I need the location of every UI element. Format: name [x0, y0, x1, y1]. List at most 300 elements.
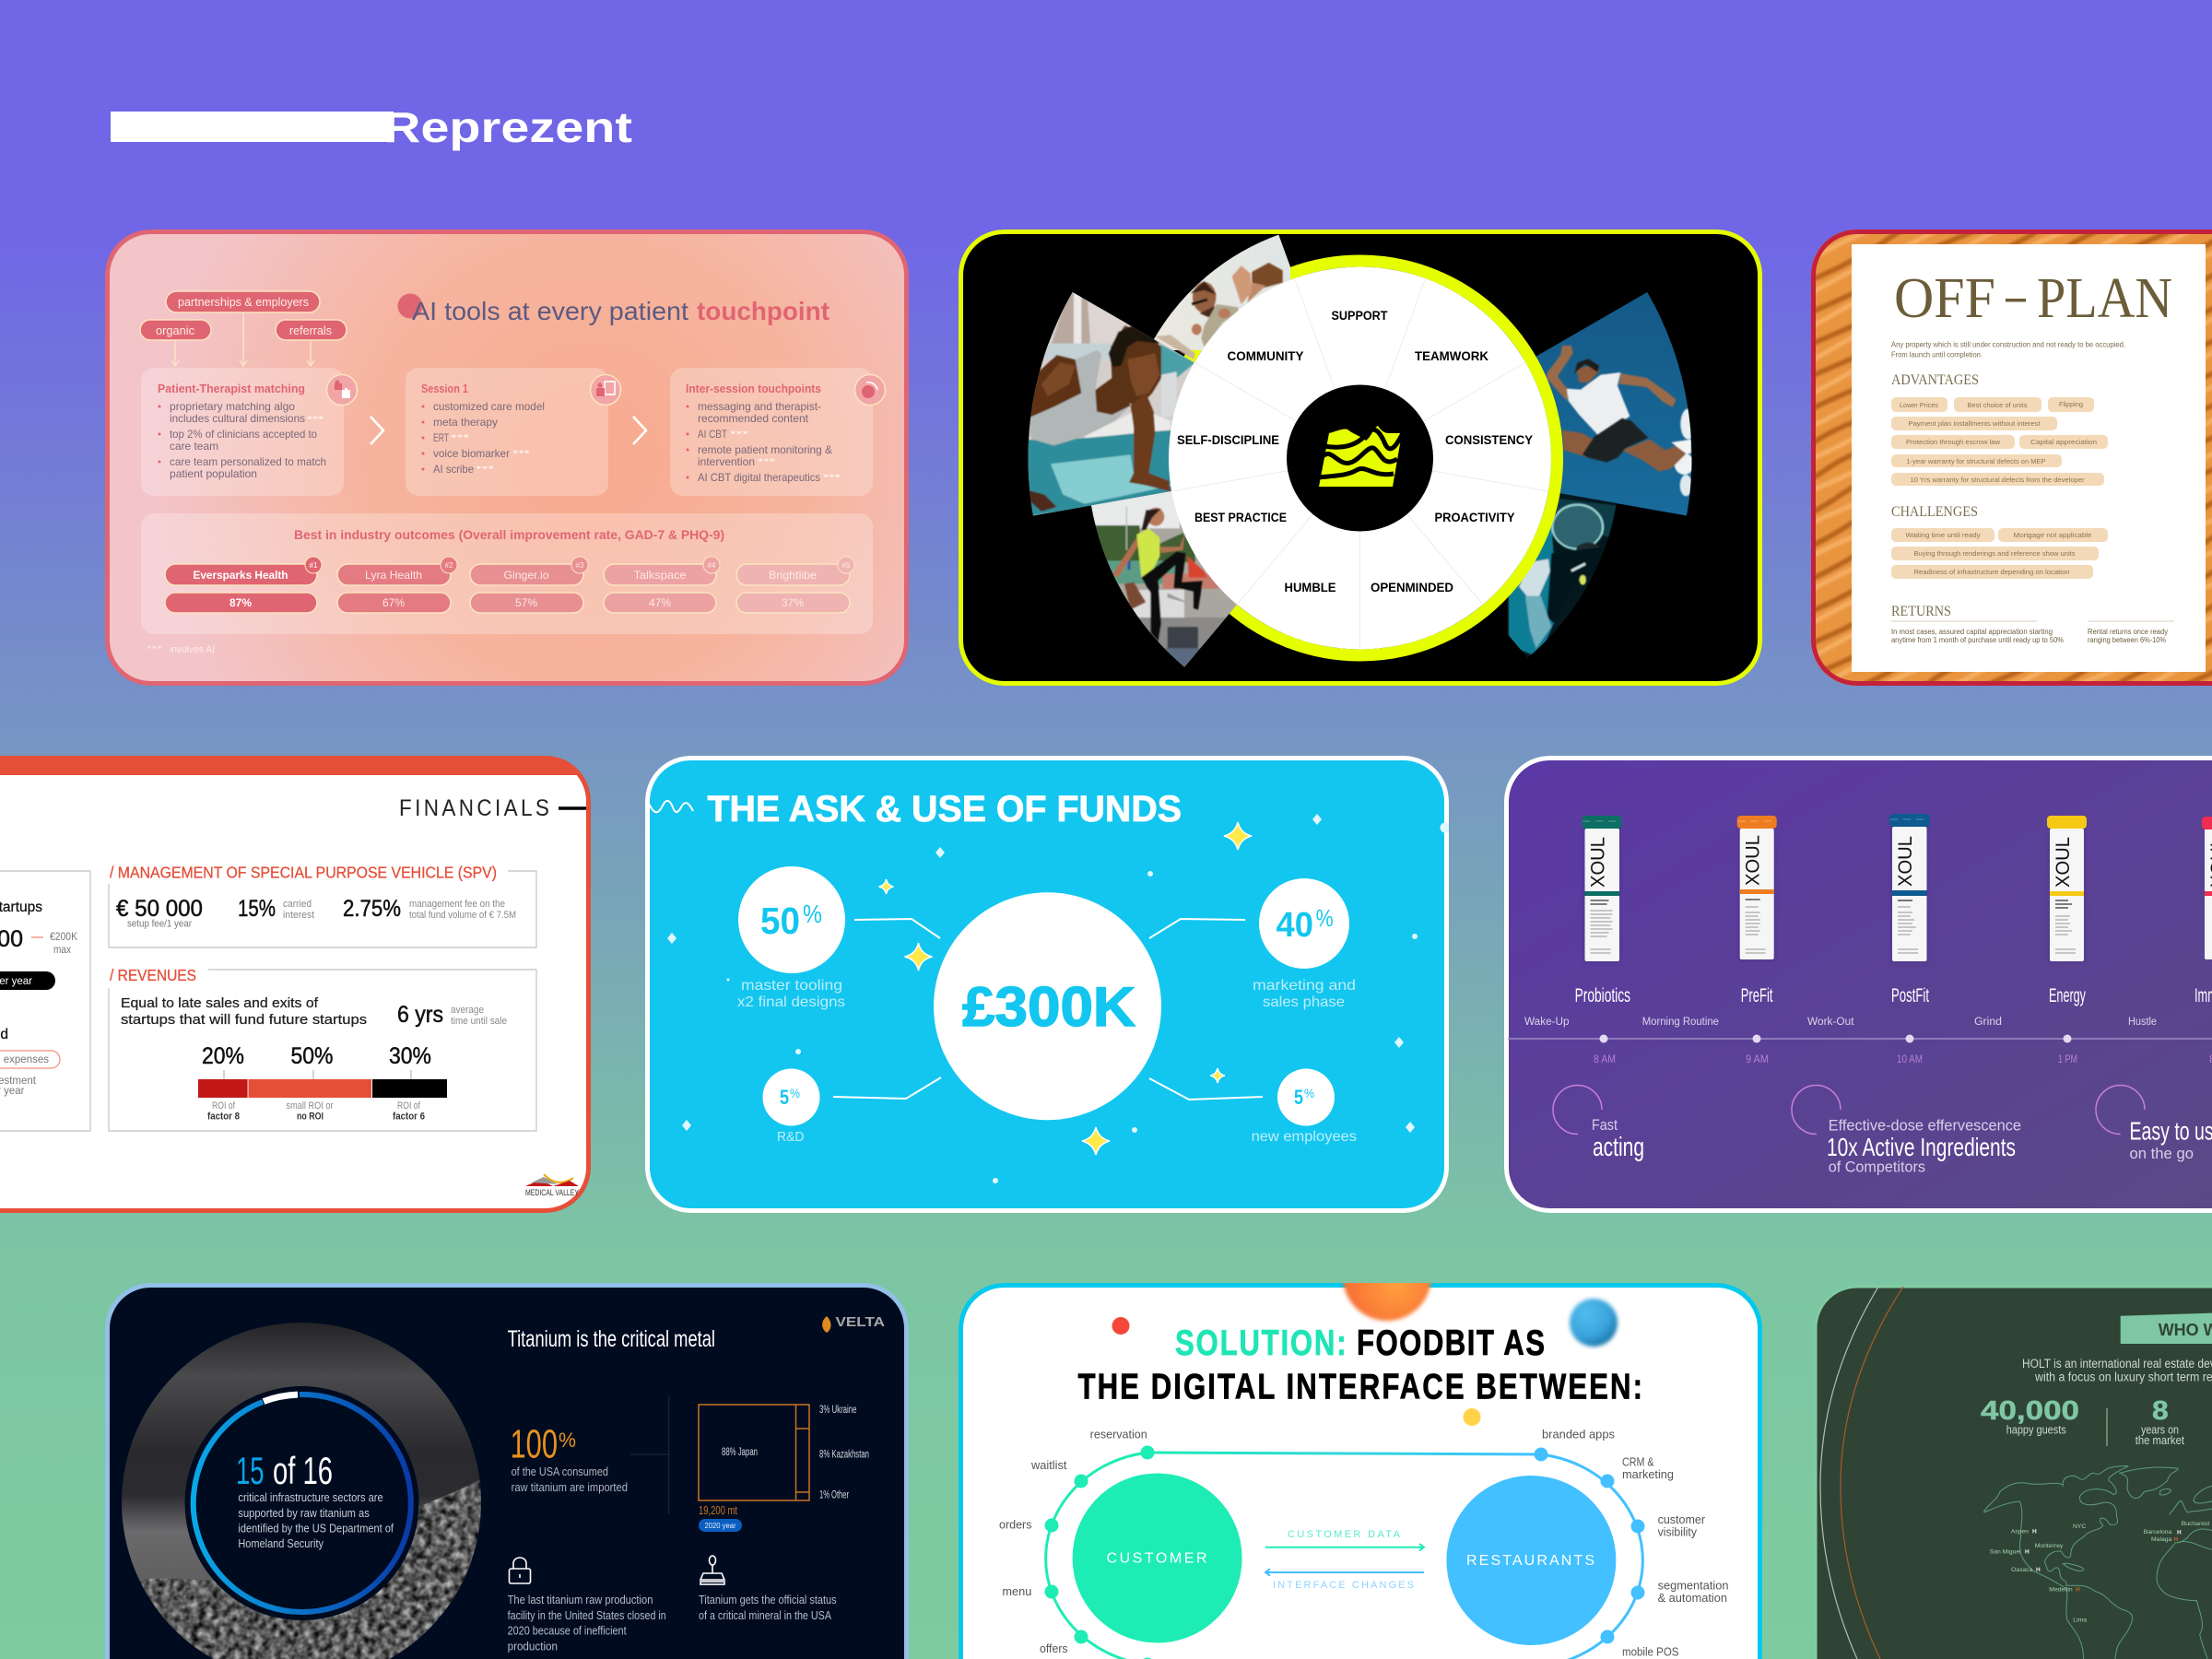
- left box fragments: max: [53, 945, 71, 956]
- wheel labels: HUMBLE: [1285, 581, 1336, 594]
- stat: 50 percent: [737, 866, 845, 1010]
- stacked bar: ROI split: no ROI: [297, 1112, 324, 1123]
- stat: 50 percent: 50: [760, 900, 800, 942]
- footnote: involves AI: ***: [147, 644, 163, 653]
- title: AI tools: [398, 293, 830, 325]
- pill: partnerships and employers: partnerships & employers: [178, 295, 309, 309]
- arrow: customer data: CUSTOMER DATA: [1288, 1529, 1401, 1540]
- panel: Patient-Therapist matching: proprietary matching algo: [170, 400, 295, 413]
- photo: man push-up: [1029, 292, 1194, 516]
- dial: 15 of 16: 15: [236, 1449, 265, 1492]
- text: last production facility: production: [508, 1640, 558, 1653]
- map: city labels: Bucharest: [2182, 1521, 2209, 1527]
- wheel labels: PROACTIVITY: [1434, 511, 1515, 524]
- panel: Inter-session touchpoints: [670, 368, 873, 496]
- ranking: Lyra Health: 67%: [382, 596, 405, 609]
- pill: organic: [140, 320, 211, 340]
- pill: organic: organic: [156, 324, 194, 337]
- map: property markers: H: [2173, 1536, 2179, 1543]
- dial: 15 of 16: supported by raw titanium as: [238, 1506, 370, 1520]
- map: property markers: H: [2025, 1548, 2030, 1556]
- title: OFF-PLAN: [1894, 267, 2172, 330]
- panel: Inter-session touchpoints: AI CBT digital therapeutics: [698, 471, 820, 484]
- section: SPV management: [109, 864, 536, 947]
- text: last production facility: The last titanium raw production: [508, 1593, 653, 1606]
- dial: 15 of 16: [184, 1386, 418, 1620]
- product names: [1575, 985, 2212, 1006]
- orbit: restaurant side: CRM &: [1622, 1456, 1654, 1469]
- panel: Inter-session touchpoints: ***: [730, 429, 749, 439]
- icon: stamp: [700, 1556, 724, 1584]
- chips: advantages: Capital appreciation: [2030, 438, 2097, 446]
- heading: returns: RETURNS: [1891, 604, 1951, 619]
- photo: jumping man: [1525, 292, 1692, 516]
- ring: lime: [1163, 261, 1558, 655]
- text: official status: of a critical mineral in the USA: [699, 1608, 831, 1622]
- map: city labels: Medellin: [2049, 1587, 2073, 1593]
- tube: energy: [2047, 816, 2087, 963]
- panel: Session 1: Session 1: [421, 382, 468, 395]
- stacked bar: ROI split: [198, 1043, 447, 1123]
- chips: advantages: 1-year warranty for structural defects on MEP: [1906, 457, 2046, 465]
- panel: Inter-session touchpoints: intervention: [698, 455, 755, 468]
- panel: Patient-Therapist matching: Patient-Therapist matching: [158, 382, 305, 395]
- icon: puzzle: [326, 374, 358, 406]
- panel: Patient-Therapist matching: care team personalized to match: [170, 455, 326, 468]
- timeline: 9 AM: [1746, 1054, 1769, 1065]
- callout: fast acting: [1553, 1086, 1644, 1162]
- title: FINANCIALS: FINANCIALS: [399, 795, 549, 821]
- intro text: From launch until completion.: [1891, 351, 1983, 359]
- heading: Titanium is the critical metal: Titanium is the critical metal: [508, 1326, 715, 1352]
- chart: import share treemap: 2020 year: [704, 1522, 736, 1530]
- logo: Velta: [822, 1314, 885, 1333]
- stat: 8 years: 8: [2152, 1396, 2169, 1426]
- stat: 8 years: [2136, 1396, 2184, 1447]
- callout: 10x active ingredients: [1792, 1086, 2021, 1176]
- photo: diver: [1508, 493, 1617, 658]
- tube: energy: XOUL: [2053, 837, 2074, 888]
- arrows into first panel: [171, 312, 314, 366]
- heading: outcomes: Best in industry outcomes (Overall improvement rate, GAD-7 & PHQ-9): [294, 528, 724, 542]
- panel: Off-plan: [1811, 229, 2212, 686]
- tube: postfit: XOUL: [1895, 836, 1916, 887]
- stat: 5 percent new employees: [1252, 1069, 1357, 1145]
- chips: advantages: Best choice of units: [1967, 401, 2028, 409]
- stacked bar: ROI split: small ROI or: [286, 1100, 334, 1112]
- ranking: Eversparks Health: Eversparks Health: [194, 569, 288, 582]
- title: solution: SOLUTION:: [1175, 1324, 1347, 1363]
- logo: Medical Valley: [525, 1174, 579, 1197]
- returns text: anytime from 1 month of purchase until ready up to 50%: [1891, 636, 2064, 644]
- stat: 50 percent: x2 final designs: [737, 994, 845, 1010]
- section: revenues: [109, 966, 536, 1131]
- stat: 8 years: the market: [2136, 1434, 2184, 1447]
- map: property markers: [2025, 1528, 2182, 1593]
- stat: 40,000 guests: 40,000: [1981, 1396, 2079, 1426]
- title: solution: THE DIGITAL INTERFACE BETWEEN:: [1078, 1367, 1642, 1407]
- title: solution: FOODBIT AS: [1357, 1324, 1545, 1363]
- chips: challenges: [1891, 528, 2108, 579]
- map: property markers: H: [2036, 1567, 2041, 1573]
- panel: Inter-session touchpoints: ***: [823, 473, 841, 482]
- arrow: interface changes: INTERFACE CHANGES: [1273, 1580, 1414, 1591]
- panel: Session 1: [406, 368, 608, 496]
- photo ring: titanium sand: [120, 1323, 484, 1659]
- stacked bar: ROI split: factor 8: [207, 1112, 240, 1123]
- timeline: [1508, 1017, 2212, 1065]
- orbit: connecting top line: [1147, 1453, 1541, 1454]
- stat: 8 years: years on: [2141, 1424, 2179, 1437]
- stat: 40 percent: %: [1316, 904, 1334, 932]
- stat: 100 percent: raw titanium are imported: [512, 1481, 628, 1494]
- map: property markers: H: [2032, 1528, 2037, 1535]
- panel: values wheel: [960, 230, 1760, 684]
- chart: import share treemap: 88% Japan: [722, 1447, 758, 1458]
- stacked bar: ROI split: 20%: [202, 1043, 244, 1069]
- stat: 40 percent: 40: [1276, 906, 1313, 945]
- panel: Session 1: ***: [451, 433, 470, 442]
- stat: 40,000 guests: happy guests: [2006, 1424, 2066, 1437]
- returns text: Rental returns once ready: [2088, 628, 2168, 636]
- wheel labels: SELF-DISCIPLINE: [1177, 433, 1279, 447]
- text: last production facility: [508, 1593, 666, 1653]
- stacked bar: ROI split: ROI of: [397, 1100, 421, 1112]
- chart: import share treemap: [699, 1405, 869, 1532]
- arrow: customer data: [1265, 1529, 1424, 1550]
- stat: 100 percent: %: [559, 1429, 576, 1452]
- dial: 15 of 16: of 16: [273, 1449, 333, 1492]
- arrow: chevron 1: [371, 417, 383, 444]
- product names: Probiotics: [1575, 985, 1630, 1006]
- chart: import share treemap: 3% Ukraine: [819, 1405, 857, 1416]
- map: city labels: San Miguel: [1990, 1548, 2021, 1556]
- panel: Session 1: ***: [512, 449, 531, 458]
- section: SPV management: total fund volume of € 7.5M: [409, 910, 516, 921]
- ranking: Lyra Health: Lyra Health: [365, 569, 422, 582]
- returns text: In most cases, assured capital appreciation starting: [1891, 628, 2053, 636]
- center circle: £300K: [934, 892, 1161, 1120]
- text: last production facility: facility in the United States closed in: [508, 1608, 666, 1622]
- map: city labels: Malaga: [2151, 1536, 2172, 1543]
- panel: Inter-session touchpoints: messaging and therapist-: [698, 400, 821, 413]
- timeline: Morning Routine: [1642, 1017, 1719, 1028]
- stacked bar: ROI split: ROI of: [212, 1100, 236, 1112]
- map: world outline: [1983, 1466, 2212, 1659]
- photo: athletes training: [1091, 491, 1237, 667]
- callout: 10x active ingredients: 10x Active Ingredients: [1827, 1133, 2016, 1161]
- chips: challenges: Waiting time until ready: [1906, 531, 1981, 539]
- panel: Patient-Therapist matching: [141, 368, 344, 496]
- tube: immunity: [2202, 817, 2212, 959]
- stat: 40 percent: marketing and: [1253, 978, 1356, 994]
- stat: 5 percent R and D: [763, 1069, 820, 1145]
- chips: advantages: Lower Prices: [1900, 401, 1938, 409]
- panel: Patient-Therapist matching: top 2% of clinicians accepted to: [170, 428, 317, 441]
- orbit: customer side: [999, 1429, 1154, 1659]
- chips: advantages: Flipping: [2059, 400, 2083, 408]
- footnote: involves AI: [147, 645, 214, 653]
- ranking: Ginger.io: Ginger.io: [503, 569, 549, 582]
- stacked bar: ROI split: 50%: [291, 1043, 334, 1069]
- left box fragments: [0, 871, 90, 1131]
- map: city labels: [1990, 1521, 2209, 1624]
- circle: customer: [1073, 1473, 1242, 1642]
- section: SPV management: € 50 000: [116, 896, 203, 922]
- photo: friends high five: [1154, 234, 1290, 359]
- ranking: Talkspace: 47%: [649, 596, 671, 609]
- circle: customer: CUSTOMER: [1106, 1551, 1207, 1567]
- section: SPV management: setup fee/1 year: [127, 919, 192, 930]
- panel: Session 1: AI scribe: [433, 463, 474, 476]
- panel: Patient-Therapist matching: patient population: [170, 467, 257, 480]
- pill: partnerships and employers: [166, 291, 320, 312]
- panel: HOLT who we are: [1816, 1287, 2212, 1659]
- orbit: customer side: orders: [999, 1519, 1032, 1532]
- panel: Patient-Therapist matching: includes cultural dimensions: [170, 412, 305, 425]
- wheel labels: [1177, 309, 1533, 594]
- dial: 15 of 16: Homeland Security: [238, 1536, 324, 1550]
- ranking: Brightlibe: 37%: [782, 596, 804, 609]
- orbit: restaurant side: marketing: [1622, 1468, 1674, 1481]
- title: AI tools: touchpoint: [697, 297, 830, 325]
- chips: advantages: Protection through escrow law: [1906, 438, 2001, 446]
- icon: presenter: [590, 374, 621, 406]
- stat: 5 percent new employees: 5: [1294, 1086, 1303, 1109]
- timeline: Grind: [1974, 1017, 2002, 1028]
- panel: Patient-Therapist matching: care team: [170, 440, 218, 453]
- pill: referrals: [276, 320, 347, 340]
- wheel: white disc with spokes: [1169, 267, 1551, 649]
- stat: 5 percent R and D: R&D: [777, 1129, 805, 1145]
- logo: Reprezent wordmark: [111, 103, 632, 151]
- orbit: restaurant side: visibility: [1658, 1526, 1698, 1539]
- timeline: Work-Out: [1807, 1017, 1854, 1028]
- panel: Inter-session touchpoints: Inter-session touchpoints: [686, 382, 821, 395]
- stat: 5 percent new employees: new employees: [1252, 1129, 1357, 1145]
- section: SPV management: / MANAGEMENT OF SPECIAL PURPOSE VEHICLE (SPV): [110, 864, 497, 882]
- stat: 50 percent: %: [803, 900, 822, 928]
- stat: 5 percent R and D: %: [790, 1086, 800, 1100]
- orbit: restaurant side: customer: [1658, 1513, 1705, 1526]
- orbit: restaurant side: mobile POS: [1622, 1646, 1679, 1659]
- ranking: Brightlibe: #5: [842, 561, 851, 570]
- map: city labels: Barcelona: [2144, 1529, 2172, 1535]
- section: revenues: time until sale: [451, 1016, 507, 1027]
- orbit: restaurant side: branded apps: [1542, 1429, 1615, 1441]
- intro text: [2022, 1357, 2212, 1384]
- wheel labels: OPENMINDED: [1371, 581, 1453, 594]
- chart: import share treemap: 19,200 mt: [699, 1503, 737, 1517]
- panel: Patient-Therapist matching: ***: [307, 415, 324, 424]
- tube: prefit: XOUL: [1743, 835, 1764, 886]
- chips: challenges: Mortgage not applicable: [2013, 531, 2092, 539]
- returns text: ranging between 6%-10%: [2088, 636, 2166, 644]
- callout: fast acting: Fast: [1592, 1116, 1618, 1134]
- panel: Session 1: ERT: [433, 431, 449, 444]
- callout: 10x active ingredients: of Competitors: [1829, 1159, 1925, 1176]
- panel: Inter-session touchpoints: remote patient monitoring &: [698, 443, 832, 456]
- ranking: Ginger.io: [470, 557, 588, 613]
- returns text: [1891, 621, 2174, 644]
- dial: 15 of 16: critical infrastructure sectors are: [238, 1490, 383, 1504]
- title: OFF-PLAN: OFF: [1894, 267, 1995, 330]
- chart: import share treemap: 8% Kazakhstan: [819, 1450, 869, 1461]
- callout: easy to use: [2096, 1086, 2212, 1162]
- title: ask: THE ASK & USE OF FUNDS: [708, 789, 1182, 830]
- title: OFF-PLAN: PLAN: [2037, 267, 2172, 330]
- chart: import share treemap: 1% Other: [819, 1490, 849, 1501]
- wheel labels: COMMUNITY: [1228, 349, 1303, 363]
- callout: easy to use: on the go: [2129, 1145, 2194, 1162]
- logo: Medical Valley: MEDICAL VALLEY: [525, 1188, 579, 1197]
- intro text: [1891, 341, 2125, 359]
- icon: lock: [509, 1558, 531, 1583]
- panel: Financials: [0, 756, 591, 1211]
- panel: XOUL timeline: [1506, 758, 2212, 1211]
- orbit: customer side: waitlist: [1030, 1459, 1067, 1472]
- stat: 100 percent: 100: [511, 1422, 558, 1467]
- ranking: Talkspace: #4: [708, 561, 716, 570]
- panel: Inter-session touchpoints: recommended content: [698, 412, 809, 425]
- text: last production facility: 2020 because of inefficient: [508, 1624, 627, 1638]
- left box fragments: €200K: [50, 932, 77, 943]
- stacked bar: ROI split: factor 6: [393, 1112, 425, 1123]
- tube: probiotics: XOUL: [1587, 837, 1609, 888]
- tube: probiotics: [1582, 816, 1622, 963]
- product names: PostFit: [1891, 985, 1929, 1006]
- stat: 5 percent R and D: 5: [780, 1086, 789, 1109]
- decorative arcs: [1820, 1287, 1903, 1659]
- panel: Inter-session touchpoints: AI CBT: [698, 428, 728, 441]
- chips: advantages: [1891, 397, 2108, 486]
- map: city labels: Monterrey: [2035, 1543, 2064, 1549]
- tube: prefit: [1737, 816, 1777, 961]
- section: revenues: / REVENUES: [110, 966, 196, 984]
- ranking: Lyra Health: [337, 557, 457, 613]
- panel: AI tools at every patient touchpoint: [107, 232, 907, 684]
- chips: challenges: Buying through renderings and reference show units: [1913, 549, 2076, 558]
- panel: Foodbit solution: [960, 1232, 1760, 1659]
- white sheet: [1852, 244, 2206, 672]
- ranking: Brightlibe: [736, 557, 854, 613]
- circle: restaurants: RESTAURANTS: [1466, 1553, 1594, 1569]
- panel: Titanium: [107, 1285, 907, 1659]
- heading: advantages: ADVANTAGES: [1891, 372, 1979, 388]
- center circle: £300K: £300K: [962, 976, 1135, 1038]
- product names: Energy: [2049, 985, 2086, 1006]
- stat: 40 percent: sales phase: [1263, 994, 1345, 1010]
- ranking: Eversparks Health: 87%: [229, 596, 252, 609]
- timeline: 1 PM: [2058, 1054, 2077, 1065]
- stat: 5 percent new employees: %: [1304, 1086, 1314, 1100]
- stat: 40,000 guests: [1981, 1396, 2079, 1437]
- ranking: Ginger.io: #3: [576, 561, 584, 570]
- panel: Inter-session touchpoints: ***: [758, 457, 776, 466]
- connector lines: [833, 919, 1263, 1100]
- section: revenues: startups that will fund future startups: [121, 1012, 367, 1028]
- decorative sparkles and dots: [667, 814, 1451, 1183]
- icon: chat bubble: [855, 374, 885, 406]
- chips: advantages: Payment plan installments without interest: [1908, 419, 2041, 428]
- ranking: Eversparks Health: #1: [310, 561, 318, 570]
- intro text: Any property which is still under construction and not ready to be occupied.: [1891, 341, 2125, 349]
- orbit: restaurant side: & automation: [1658, 1592, 1727, 1605]
- section: SPV management: 15%: [238, 896, 276, 922]
- wheel labels: TEAMWORK: [1415, 349, 1488, 363]
- stacked bar: ROI split: 30%: [389, 1043, 431, 1069]
- map: property markers: H: [2076, 1587, 2080, 1593]
- circle: restaurants: [1446, 1476, 1616, 1645]
- ranking: Talkspace: [604, 557, 720, 613]
- orbit: customer side: reservation: [1090, 1429, 1147, 1441]
- panel: Session 1: ***: [476, 465, 495, 474]
- panel: Session 1: voice biomarker: [433, 447, 510, 460]
- section: SPV management: interest: [283, 910, 314, 921]
- orbit: customer side: offers: [1040, 1642, 1068, 1655]
- arrow: chevron 2: [633, 417, 646, 444]
- product names: PreFit: [1741, 985, 1773, 1006]
- panel: Session 1: customized care model: [433, 400, 545, 413]
- section: SPV management: 2.75%: [343, 896, 401, 922]
- ranking: Lyra Health: #2: [445, 561, 453, 570]
- orbit: customer side: menu: [1002, 1585, 1031, 1598]
- logo: Reprezent wordmark: Reprezent: [383, 103, 632, 151]
- text: official status: Titanium gets the official status: [699, 1593, 837, 1606]
- text: official status: [699, 1593, 837, 1622]
- title: AI tools: AI tools at every patient: [412, 297, 688, 325]
- ranking: Ginger.io: 57%: [515, 596, 537, 609]
- map: city labels: Aspen: [2011, 1528, 2029, 1535]
- ranking: Brightlibe: Brightlibe: [769, 569, 817, 582]
- logo: Velta: VELTA: [835, 1314, 885, 1330]
- map: property markers: H: [2177, 1530, 2182, 1535]
- tube: postfit: [1889, 814, 1930, 963]
- ranking: Talkspace: Talkspace: [634, 569, 687, 582]
- chips: challenges: Readiness of infrastructure depending on location: [1913, 568, 2070, 576]
- stat: 100 percent: of the USA consumed: [512, 1465, 608, 1478]
- orbit: restaurant side: segmentation: [1658, 1580, 1729, 1593]
- heading: challenges: CHALLENGES: [1891, 504, 1978, 520]
- map: city labels: NYC: [2073, 1524, 2086, 1530]
- section: SPV management: carried: [283, 899, 312, 910]
- dial: 15 of 16: identified by the US Department of: [238, 1522, 394, 1535]
- pill: referrals: referrals: [289, 324, 332, 337]
- stat: 100 percent: [511, 1422, 628, 1494]
- callout: 10x active ingredients: Effective-dose effervescence: [1829, 1117, 2021, 1135]
- timeline: Hustle: [2128, 1017, 2157, 1028]
- section: revenues: Equal to late sales and exits of: [121, 995, 319, 1011]
- wheel labels: CONSISTENCY: [1445, 433, 1533, 447]
- callout: fast acting: acting: [1593, 1133, 1644, 1162]
- hub with wave logo: [1287, 385, 1433, 531]
- timeline: 10 AM: [1897, 1054, 1923, 1065]
- decorative orbs: [1112, 1232, 1618, 1426]
- tag: who we are: [2121, 1312, 2212, 1344]
- section: SPV management: management fee on the: [409, 899, 505, 910]
- ranking: Eversparks Health: [165, 557, 322, 613]
- stat: 50 percent: master tooling: [741, 978, 842, 994]
- footnote: involves AI: involves AI: [170, 644, 215, 655]
- panel: Session 1: meta therapy: [433, 416, 498, 429]
- timeline: 8 AM: [1594, 1054, 1616, 1065]
- stat: 40 percent: [1253, 878, 1356, 1010]
- timeline: Wake-Up: [1524, 1017, 1570, 1028]
- title: solution: [1078, 1324, 1642, 1407]
- orbit: restaurant side: [1534, 1429, 1729, 1659]
- panel: The ask and use of funds: [647, 758, 1451, 1211]
- map: city labels: Lima: [2073, 1617, 2087, 1624]
